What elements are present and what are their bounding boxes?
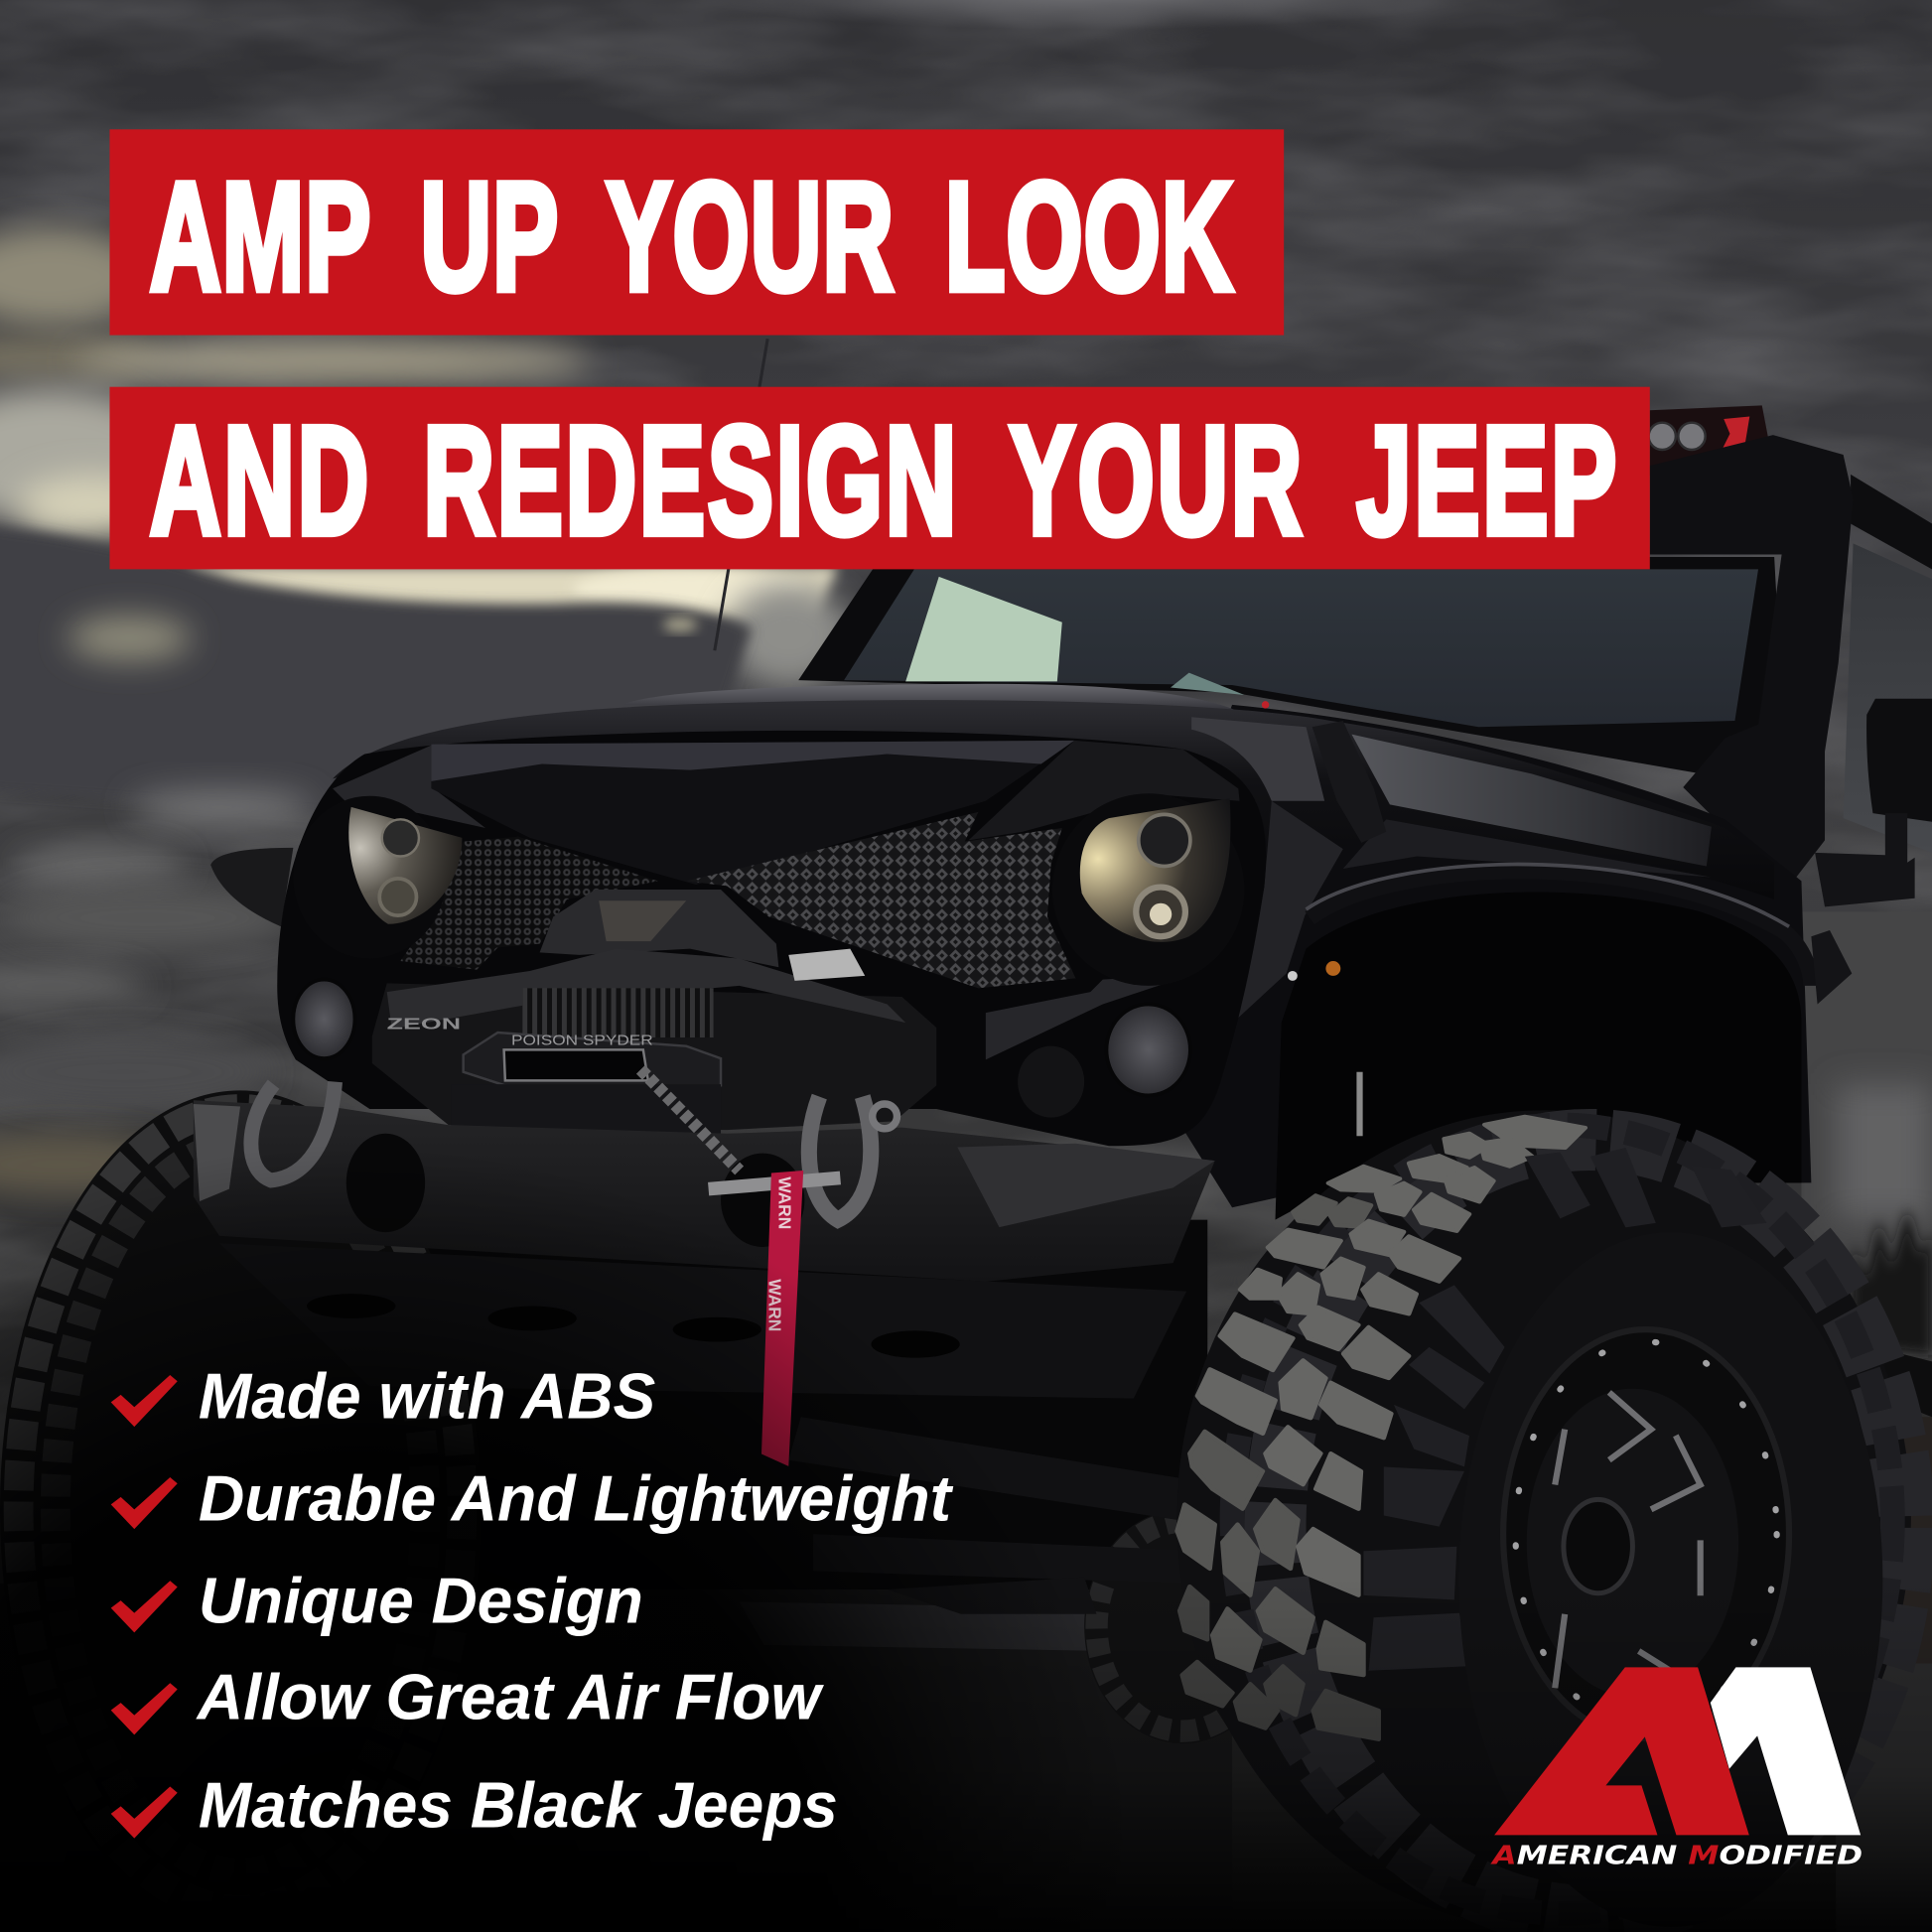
right sky behind jeep xyxy=(1801,911,1932,1355)
shackle right xyxy=(709,1097,897,1220)
headline banner 2: AND REDESIGN YOUR JEEP xyxy=(150,394,1618,567)
mirror xyxy=(1866,699,1932,822)
wheel well xyxy=(1276,893,1801,1220)
winch xyxy=(372,890,936,1140)
headline banner 1: AMP UP YOUR LOOK xyxy=(150,150,1234,323)
silver plate xyxy=(788,949,865,981)
brow right xyxy=(968,741,1240,840)
speaker xyxy=(1018,1046,1084,1118)
fog hole left xyxy=(346,1134,425,1232)
rear tire xyxy=(1084,1509,1282,1743)
mid shoulder lugs xyxy=(1419,1285,1505,1374)
marker lights xyxy=(1325,961,1340,976)
tree line xyxy=(1849,1207,1932,1355)
hinge xyxy=(1811,930,1852,1004)
feature list xyxy=(111,1360,954,1842)
grille side gloss xyxy=(333,745,485,828)
inner grille fender panel xyxy=(1238,801,1343,1018)
side door window xyxy=(1844,475,1932,853)
hood line xyxy=(333,700,1774,899)
rocker xyxy=(1882,1349,1932,1417)
logo: American Modified: AMERICAN MODIFIED xyxy=(1490,1840,1863,1869)
right fog light xyxy=(1106,1004,1190,1095)
mesh left xyxy=(400,837,658,970)
mesh right xyxy=(686,812,1075,988)
brand label: ZEON xyxy=(387,1015,461,1033)
bumper left corner xyxy=(194,1104,240,1201)
lower chevron xyxy=(986,973,1195,1059)
logo: American Modified xyxy=(1490,1667,1863,1869)
tire sidewall xyxy=(1458,1232,1882,1927)
axle and suspension xyxy=(788,1417,1189,1614)
feature: matches black jeeps: Matches Black Jeeps xyxy=(199,1770,838,1842)
skid plate xyxy=(219,1243,1186,1399)
red winch strap xyxy=(761,1171,803,1466)
fairlead brand: POISON SPYDER xyxy=(511,1033,653,1048)
dark cloud bank xyxy=(0,523,752,813)
light bar mount and A-pillar xyxy=(1650,435,1854,890)
bumper facet xyxy=(957,1144,1215,1227)
dark gradient overlay xyxy=(0,1134,1932,1932)
front tire xyxy=(1176,1110,1911,1928)
hood latch xyxy=(1312,721,1386,843)
fog hole right xyxy=(721,1154,804,1247)
rim bolts xyxy=(1516,1342,1777,1726)
roof light bar xyxy=(1649,405,1773,476)
fairlead xyxy=(464,1033,721,1099)
windshield frame and glass xyxy=(798,557,1787,788)
red hood marker xyxy=(1262,701,1269,709)
cowl gloss xyxy=(1191,717,1324,801)
mirror arm xyxy=(1815,813,1915,906)
wheel face xyxy=(1527,1389,1738,1697)
wheel hub xyxy=(1564,1499,1632,1593)
winch rope drum xyxy=(522,988,714,1037)
feature: unique design: Unique Design xyxy=(199,1565,643,1636)
fender flare xyxy=(1310,871,1811,986)
rim spokes xyxy=(1555,1392,1701,1688)
right headlight xyxy=(1052,793,1244,986)
rim xyxy=(1503,1329,1789,1738)
winch line xyxy=(640,1069,740,1171)
turn signal horn xyxy=(210,848,293,926)
hood highlight xyxy=(1351,735,1712,866)
shoulder lugs xyxy=(1276,1140,1903,1916)
feature: durable and lightweight: Durable And Lightweight xyxy=(199,1462,954,1534)
hood top strip xyxy=(622,684,1235,710)
antenna xyxy=(715,339,767,650)
under-car shadow xyxy=(198,1220,1207,1589)
red winch strap: WARN xyxy=(774,1176,794,1229)
lower fender panel xyxy=(1343,819,1712,878)
tread blocks xyxy=(1177,1117,1767,1739)
silver bracket xyxy=(1356,1072,1363,1136)
red winch strap: WARN xyxy=(764,1279,784,1331)
windshield reflection xyxy=(905,577,1062,681)
feature: made with ABS: Made with ABS xyxy=(199,1360,655,1432)
grille upper V xyxy=(431,741,1074,885)
road xyxy=(0,1584,1232,1932)
jeep body xyxy=(333,684,1932,1417)
winch dome xyxy=(540,890,778,967)
left headlight xyxy=(293,796,462,959)
feature: allow great air flow: Allow Great Air Flow xyxy=(196,1661,824,1732)
grille xyxy=(277,731,1266,1146)
left fog light xyxy=(293,980,354,1058)
far left tire xyxy=(0,1090,481,1928)
front bumper xyxy=(194,1100,1215,1282)
shackle left xyxy=(251,1082,336,1180)
